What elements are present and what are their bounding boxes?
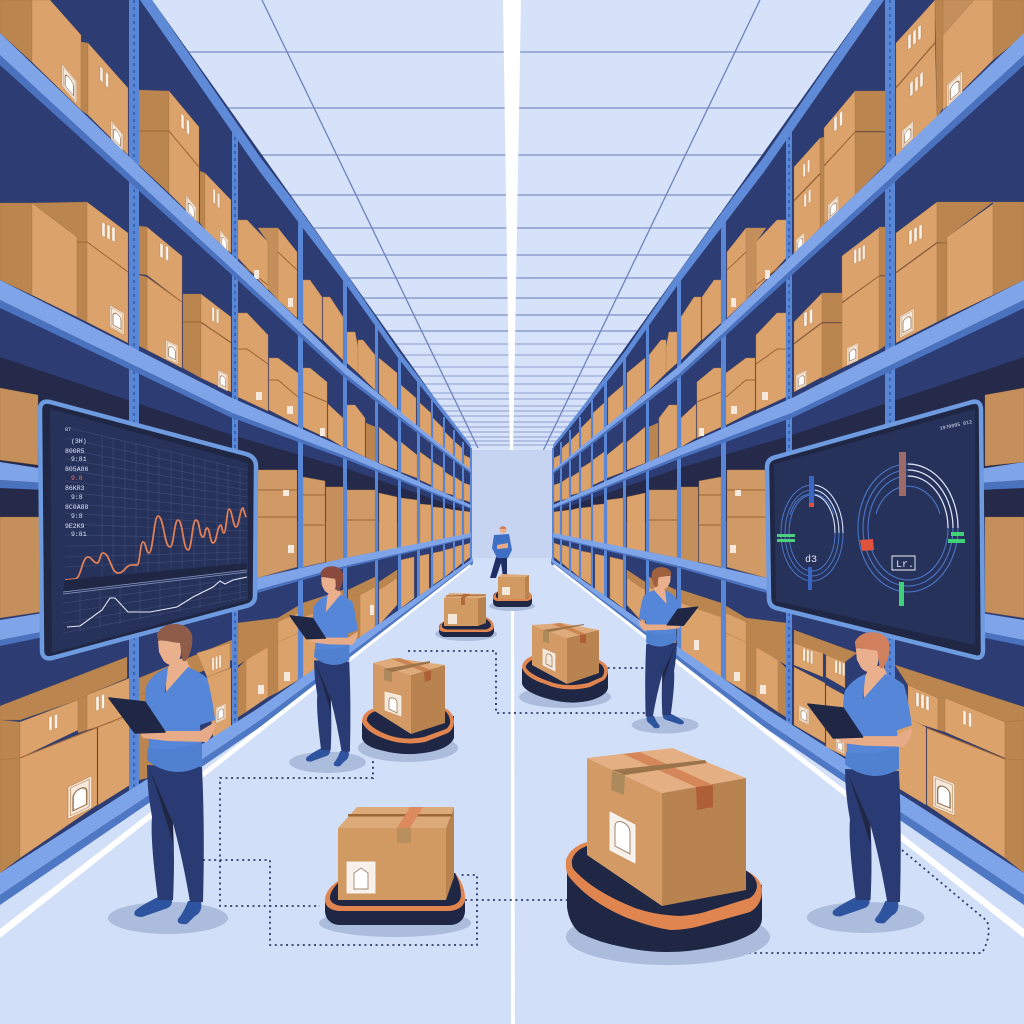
chart labels: 8C0A88 bbox=[65, 504, 89, 511]
near boxes left rack bbox=[0, 0, 232, 873]
back wall bbox=[465, 450, 560, 562]
far boxes left rack bbox=[238, 220, 470, 717]
chart labels: 9:8 bbox=[71, 513, 83, 520]
left gauge label: d3 bbox=[805, 554, 817, 566]
robot center with box bbox=[519, 623, 611, 708]
worker: center right with tablet bbox=[632, 567, 699, 734]
robot mid-left with box bbox=[358, 658, 458, 762]
robot large front with box bbox=[566, 748, 770, 965]
screen caption: 1970085 012 bbox=[939, 419, 973, 432]
worker: left middle with tablet bbox=[289, 566, 366, 773]
left rack back panel bbox=[0, 0, 472, 900]
near boxes right rack bbox=[794, 0, 1024, 873]
chart labels: 9.8 bbox=[71, 475, 83, 482]
orange trend line bbox=[65, 508, 246, 580]
chart labels bbox=[65, 427, 89, 538]
left gauge bbox=[781, 485, 843, 581]
center floor line bbox=[511, 595, 515, 1024]
right gauge bbox=[858, 464, 958, 592]
worker: right foreground with tablet bbox=[807, 632, 924, 933]
left rack frame bbox=[0, 0, 473, 938]
right monitor: radial gauges bbox=[767, 402, 983, 658]
worker: left foreground with tablet bbox=[108, 624, 228, 934]
chart labels: 800R5 bbox=[65, 448, 85, 455]
right gauge label bbox=[892, 556, 915, 570]
robot far with box bbox=[489, 574, 535, 611]
chart labels: 805A86 bbox=[65, 466, 89, 473]
floor bbox=[0, 558, 1024, 1024]
robot left far with box bbox=[435, 593, 497, 641]
far boxes right rack bbox=[554, 220, 786, 717]
right rack back panel bbox=[552, 0, 1024, 900]
chart labels: 9E2K9 bbox=[65, 523, 85, 530]
chart labels: 87 bbox=[65, 427, 71, 433]
chart labels: 86KR3 bbox=[65, 485, 85, 492]
right rack frame bbox=[551, 0, 1024, 938]
lower chart bbox=[63, 572, 247, 633]
chart labels: 9:81 bbox=[71, 456, 87, 463]
robot bottom-left with box bbox=[319, 807, 471, 937]
right monitor: radial gauges: Lr. bbox=[896, 560, 914, 571]
chart labels: 9:8 bbox=[71, 494, 83, 501]
chart grid bbox=[65, 427, 247, 580]
left monitor: line charts bbox=[40, 402, 256, 658]
chart labels: 9:81 bbox=[71, 531, 87, 538]
ceiling bbox=[0, 0, 1024, 460]
far person bbox=[490, 526, 512, 578]
robot route lines bbox=[203, 651, 989, 953]
chart labels: (3H) bbox=[71, 438, 87, 445]
